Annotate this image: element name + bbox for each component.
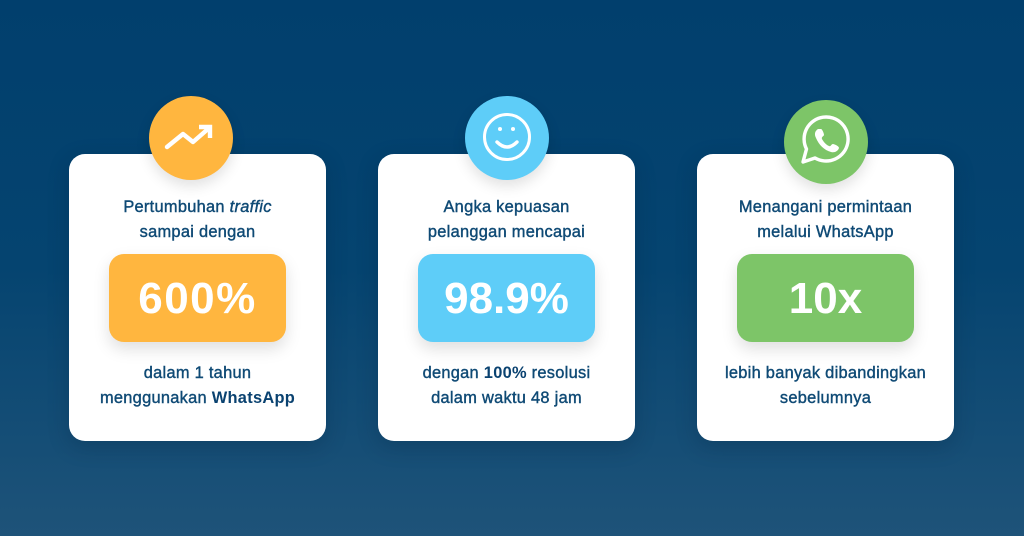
text: traffic intro line 2: sampai dengan bbox=[140, 223, 255, 241]
stat: 10x bbox=[737, 254, 914, 342]
text: satisfaction outro line 1: dengan 100% resolusi bbox=[423, 364, 590, 382]
text: WhatsApp outro line 1: lebih banyak dibandingkan bbox=[725, 364, 926, 382]
stat: 10x: 10x bbox=[789, 274, 862, 323]
panel: satisfaction card bbox=[378, 154, 635, 441]
stat: 600% bbox=[109, 254, 286, 342]
text: satisfaction outro line 2: dalam waktu 48 jam bbox=[431, 389, 582, 407]
icon: trending up arrow bbox=[149, 96, 233, 180]
text: traffic outro line 1: dalam 1 tahun bbox=[144, 364, 251, 382]
text: satisfaction intro line 1: Angka kepuasan bbox=[443, 198, 570, 216]
text: WhatsApp intro line 2: melalui WhatsApp bbox=[757, 223, 894, 241]
text: satisfaction intro line 2: pelanggan mencapai bbox=[428, 223, 585, 241]
panel: WhatsApp card bbox=[697, 154, 954, 441]
stat: 600%: 600% bbox=[138, 274, 257, 323]
text: traffic outro line 2: menggunakan WhatsApp bbox=[100, 389, 295, 407]
icon: WhatsApp logo bbox=[784, 100, 868, 184]
stat: 98.9% bbox=[418, 254, 595, 342]
icon: smiley face bbox=[465, 96, 549, 180]
text: WhatsApp outro line 2: sebelumnya bbox=[780, 389, 871, 407]
text: traffic intro line 1: Pertumbuhan traffic bbox=[123, 198, 272, 216]
stat: 98.9%: 98.9% bbox=[444, 274, 569, 323]
text: WhatsApp intro line 1: Menangani permintaan bbox=[739, 198, 912, 216]
panel: traffic growth card bbox=[69, 154, 326, 441]
